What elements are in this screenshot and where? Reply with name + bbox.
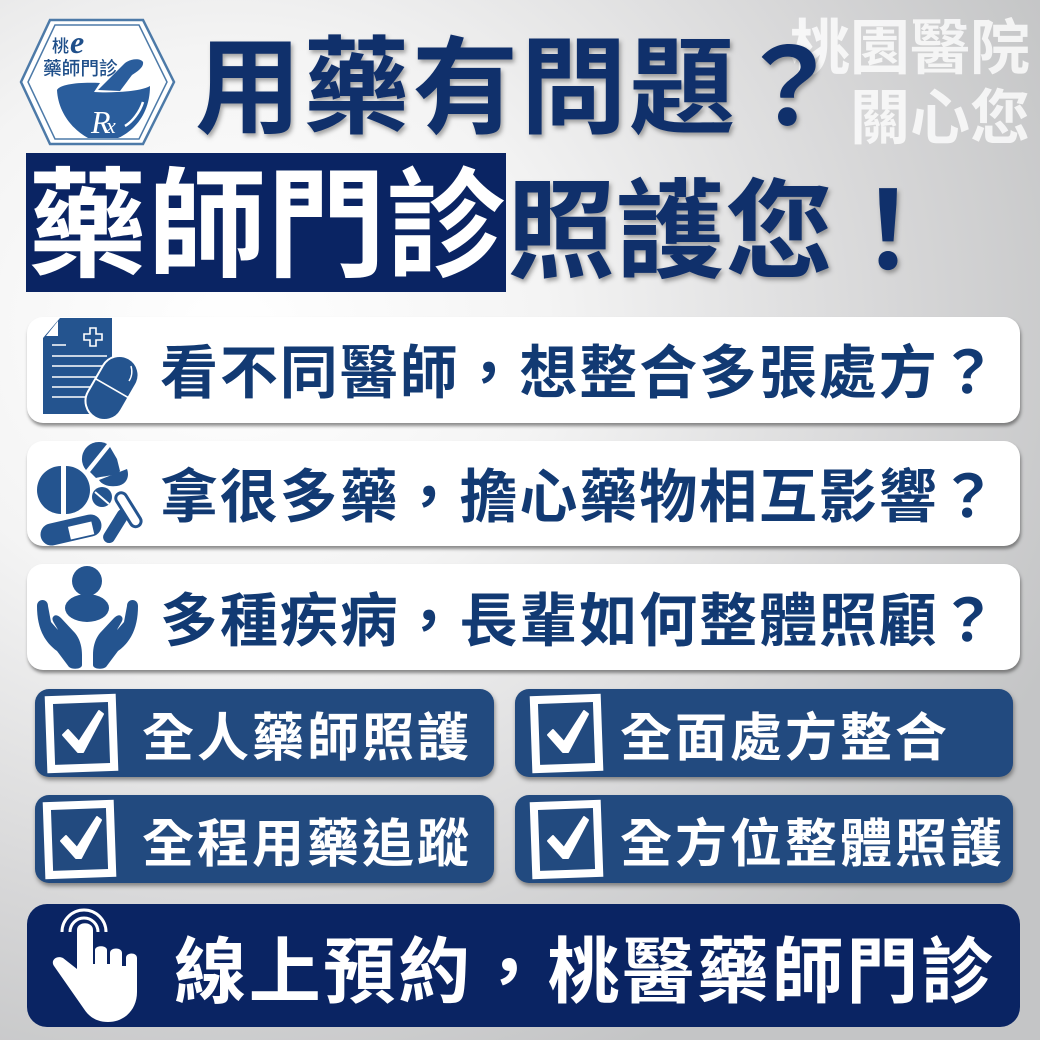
icon: hands holding person <box>37 566 138 669</box>
card 2 <box>27 441 1020 546</box>
watermark: 桃園醫院 <box>790 15 1030 82</box>
card 2 text: 拿很多藥，擔心藥物相互影響？ <box>160 465 999 530</box>
card 3 text: 多種疾病，長輩如何整體照顧？ <box>160 589 999 654</box>
button 1 text: 全人藥師照護 <box>142 710 472 768</box>
logo: x <box>105 113 116 138</box>
check icon 4 <box>530 800 604 880</box>
check icon 2 <box>530 694 604 774</box>
call to action bar <box>27 904 1020 1027</box>
check icon 1 <box>44 694 118 774</box>
card 3 <box>27 564 1020 670</box>
logo: e <box>70 24 84 60</box>
card 1 <box>27 317 1020 423</box>
title line 2 white: 藥師門診 <box>28 160 506 293</box>
check icon 3 <box>42 800 116 880</box>
icon: tapping hand <box>52 908 137 1022</box>
logo: R <box>90 104 111 140</box>
call to action text: 線上預約，桃醫藥師門診 <box>174 933 996 1013</box>
logo <box>20 18 176 146</box>
button 3 text: 全程用藥追蹤 <box>142 816 472 874</box>
icon: prescription and pill <box>43 318 138 419</box>
icon: pills <box>37 442 143 546</box>
title line 2 navy: 照護您！ <box>507 171 943 292</box>
button 4 <box>515 795 1013 883</box>
watermark: 關心您 <box>850 85 1030 152</box>
button 4 text: 全方位整體照護 <box>620 816 1005 874</box>
logo: 藥師門診 <box>43 54 118 81</box>
watermark <box>790 15 1030 152</box>
button 2 <box>515 689 1013 777</box>
title line 1: 用藥有問題？ <box>195 30 844 148</box>
button 1 <box>35 689 494 777</box>
button 3 <box>35 795 494 883</box>
title highlight block <box>26 153 506 292</box>
logo: 桃 <box>52 32 69 57</box>
button 2 text: 全面處方整合 <box>620 710 950 768</box>
card 1 text: 看不同醫師，想整合多張處方？ <box>160 341 999 406</box>
